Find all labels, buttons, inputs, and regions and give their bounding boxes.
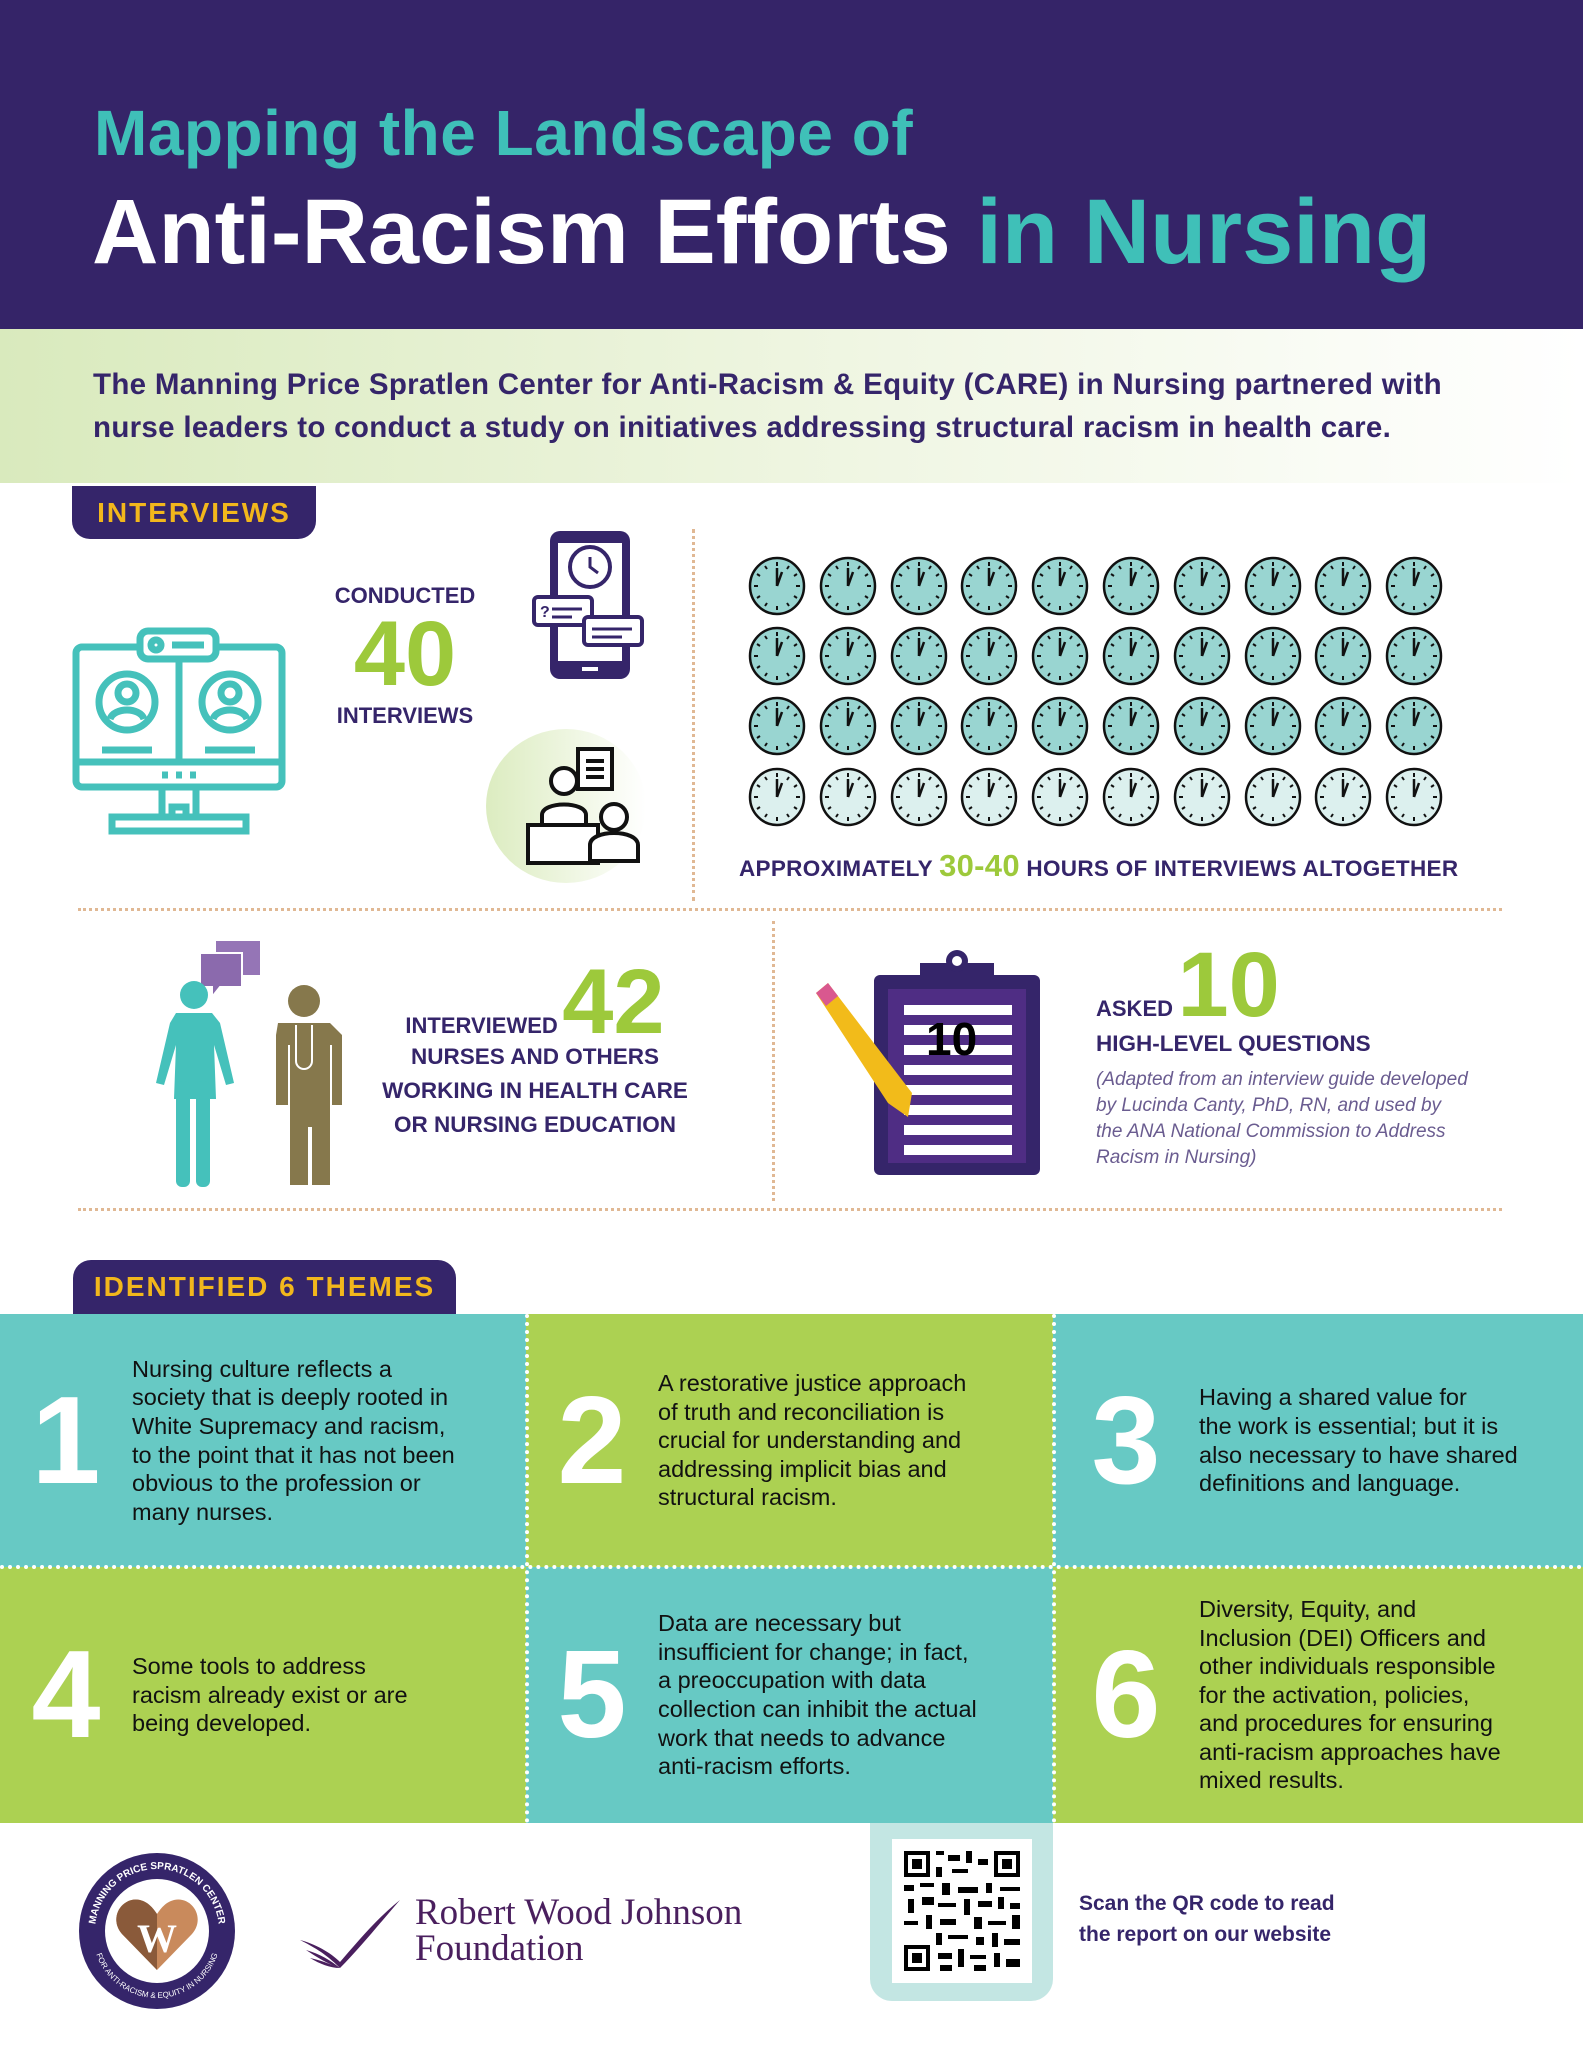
tab: identified 6 themes: IDENTIFIED 6 THEMES — [94, 1271, 435, 1302]
theme 1: Nursing culture reflects a — [132, 1356, 392, 1382]
title line 1: Mapping the Landscape of — [94, 97, 913, 169]
theme 6: Inclusion (DEI) Officers and — [1199, 1625, 1486, 1651]
theme 3: also necessary to have shared — [1199, 1442, 1518, 1468]
stat: interviewed 42 — [382, 951, 688, 1137]
theme 5: Data are necessary but — [658, 1610, 901, 1636]
theme 5: anti-racism efforts. — [658, 1753, 851, 1779]
logo: CARE center: MANNING PRICE SPRATLEN CENTER — [88, 1862, 226, 1924]
theme 2: 2 — [558, 1372, 626, 1510]
header — [0, 0, 1583, 329]
theme 6 — [1053, 1567, 1583, 1823]
theme 4: Some tools to address — [132, 1653, 366, 1679]
theme 3 — [1053, 1314, 1583, 1567]
theme 4: racism already exist or are — [132, 1682, 408, 1708]
theme 3: the work is essential; but it is — [1199, 1413, 1498, 1439]
theme 1: to the point that it has not been — [132, 1442, 455, 1468]
icon: video call monitor — [72, 628, 286, 834]
icon: clipboard with pencil — [816, 950, 1040, 1175]
theme 6: Diversity, Equity, and — [1199, 1596, 1416, 1622]
intro text: nurse leaders to conduct a study on initiatives addressing structural racism in health care. — [93, 411, 1391, 444]
logo: RWJF: Foundation — [415, 1928, 584, 1969]
QR caption: the report on our website — [1079, 1923, 1331, 1946]
theme 5 — [526, 1567, 1053, 1823]
logo: CARE center: W — [137, 1916, 177, 1961]
theme 5: work that needs to advance — [658, 1725, 945, 1751]
stat: asked 10: by Lucinda Canty, PhD, RN, and used by — [1096, 1095, 1441, 1116]
stat: asked 10: Racism in Nursing) — [1096, 1147, 1256, 1168]
theme 6: anti-racism approaches have — [1199, 1739, 1501, 1765]
logo: CARE center: FOR ANTI-RACISM & EQUITY IN NURSING — [96, 1952, 217, 1999]
stat: conducted 40 interviews: CONDUCTED — [335, 583, 475, 608]
theme 6: for the activation, policies, — [1199, 1682, 1469, 1708]
tab: interviews — [72, 486, 316, 539]
intro text — [93, 368, 1442, 444]
theme 5: a preoccupation with data — [658, 1667, 926, 1693]
tab: interviews: INTERVIEWS — [97, 496, 291, 528]
theme 2: of truth and reconciliation is — [658, 1399, 944, 1425]
QR code — [892, 1839, 1032, 1983]
divider vertical — [692, 529, 695, 901]
theme 5: 5 — [558, 1626, 626, 1764]
QR caption — [1079, 1892, 1335, 1946]
icon: nurses — [156, 941, 342, 1187]
intro band — [0, 329, 1583, 483]
stat: interviewed 42: WORKING IN HEALTH CARE — [382, 1078, 688, 1103]
stat: asked 10: the ANA National Commission to Address — [1096, 1121, 1446, 1142]
theme 6: other individuals responsible — [1199, 1653, 1496, 1679]
title line 2: Anti-Racism Efforts in Nursing — [92, 181, 1431, 283]
theme 2: structural racism. — [658, 1484, 837, 1510]
QR code panel — [870, 1823, 1053, 2001]
logo: RWJF — [300, 1892, 742, 1969]
tab: identified 6 themes — [73, 1260, 456, 1314]
clock grid — [748, 556, 1442, 826]
theme 4: 4 — [32, 1626, 100, 1764]
theme 4: being developed. — [132, 1710, 311, 1736]
QR caption: Scan the QR code to read — [1079, 1892, 1335, 1915]
intro text: The Manning Price Spratlen Center for Anti-Racism & Equity (CARE) in Nursing partnered with — [93, 368, 1442, 401]
themes grid — [0, 1314, 1583, 1823]
stat: asked 10: HIGH-LEVEL QUESTIONS — [1096, 1031, 1371, 1056]
theme 2 — [526, 1314, 1053, 1567]
theme 3: definitions and language. — [1199, 1470, 1460, 1496]
theme 2: crucial for understanding and — [658, 1427, 961, 1453]
icon: interview people — [486, 729, 640, 883]
icon: clipboard with pencil: 10 — [926, 1013, 977, 1065]
theme 1: White Supremacy and racism, — [132, 1413, 445, 1439]
stat: interviewed 42: INTERVIEWED 42 — [405, 951, 665, 1053]
theme 2: A restorative justice approach — [658, 1370, 966, 1396]
theme 6: mixed results. — [1199, 1767, 1344, 1793]
theme 1: 1 — [32, 1372, 100, 1510]
logo: RWJF: Robert Wood Johnson — [415, 1892, 742, 1933]
stat: conducted 40 interviews: INTERVIEWS — [337, 703, 473, 728]
stat: asked 10: (Adapted from an interview guide developed — [1096, 1069, 1468, 1090]
theme 1 — [0, 1314, 526, 1567]
stat: conducted 40 interviews: 40 — [354, 603, 456, 705]
icon: phone with chat: ? — [540, 604, 550, 621]
theme 6: and procedures for ensuring — [1199, 1710, 1493, 1736]
theme 1: obvious to the profession or — [132, 1470, 421, 1496]
stat: asked 10: ASKED 10 — [1096, 934, 1280, 1036]
theme 5: insufficient for change; in fact, — [658, 1639, 968, 1665]
stat: asked 10 — [1096, 934, 1468, 1168]
stat: interviewed 42: NURSES AND OTHERS — [411, 1044, 659, 1069]
stat: interviewed 42: OR NURSING EDUCATION — [394, 1112, 676, 1137]
caption: hours: APPROXIMATELY 30-40 HOURS OF INTERVIEWS ALTOGETHER — [739, 848, 1458, 883]
theme 5: collection can inhibit the actual — [658, 1696, 977, 1722]
stat: conducted 40 interviews — [335, 583, 475, 728]
logo: CARE center — [79, 1853, 235, 2009]
theme 3: 3 — [1092, 1372, 1160, 1510]
theme 6: 6 — [1092, 1626, 1160, 1764]
theme 1: many nurses. — [132, 1499, 273, 1525]
theme 4 — [0, 1567, 526, 1823]
theme 3: Having a shared value for — [1199, 1384, 1467, 1410]
theme 2: addressing implicit bias and — [658, 1456, 947, 1482]
icon: phone with chat — [532, 531, 644, 679]
theme 1: society that is deeply rooted in — [132, 1384, 448, 1410]
